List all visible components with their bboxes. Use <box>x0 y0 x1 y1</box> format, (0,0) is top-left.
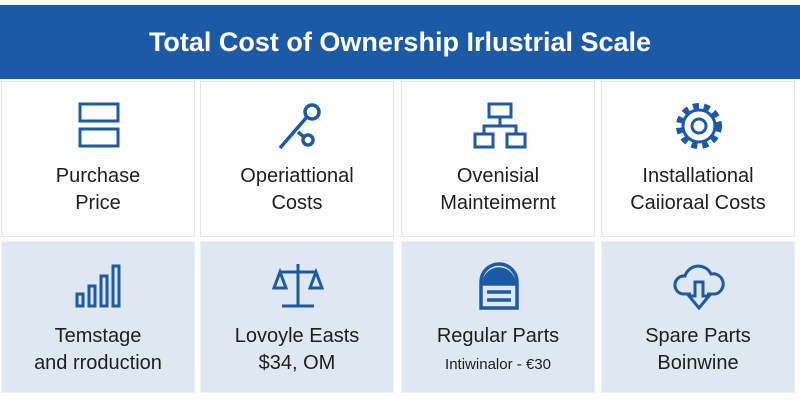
label <box>34 325 162 374</box>
label: Intiwinalor - €30 <box>445 356 551 373</box>
label: $34, OM <box>259 352 335 374</box>
panel: operational costs <box>200 81 394 237</box>
icon: cloud download <box>673 264 725 310</box>
title: Total Cost of Ownership Irlustrial Scale <box>149 27 651 57</box>
icon: bars <box>76 264 120 308</box>
label: Ovenisial <box>457 165 539 187</box>
label <box>437 325 559 373</box>
panel: maintenance <box>401 81 595 237</box>
panel: regular parts <box>401 241 595 393</box>
title <box>0 5 800 79</box>
label: Temstage <box>55 325 141 347</box>
label: Price <box>75 192 121 214</box>
label: Boinwine <box>657 352 739 374</box>
panel: installation <box>601 81 795 237</box>
label: Spare Parts <box>645 325 751 347</box>
panel: spare parts <box>601 241 795 393</box>
panel: purchase price <box>1 81 195 237</box>
label <box>440 165 556 214</box>
panel: lovoyle <box>200 241 394 393</box>
label: Installational <box>642 165 754 187</box>
icon: gauge <box>479 262 519 310</box>
label <box>630 165 766 214</box>
icon: bills <box>78 102 120 148</box>
label: and rroduction <box>34 352 162 374</box>
label: Mainteimernt <box>440 192 556 214</box>
icon: wrench <box>278 103 321 150</box>
label: Costs <box>271 192 323 214</box>
label: Caiioraal Costs <box>630 192 766 214</box>
icon: gear <box>676 103 722 149</box>
label <box>645 325 751 374</box>
label: Operiattional <box>240 165 354 187</box>
icon: flowchart <box>474 102 526 148</box>
icon: scales <box>272 264 324 308</box>
label <box>56 165 140 214</box>
label <box>240 165 354 214</box>
label: Lovoyle Easts <box>235 325 359 347</box>
panel: testing <box>1 241 195 393</box>
label: Regular Parts <box>437 325 559 347</box>
label <box>235 325 359 374</box>
label: Purchase <box>56 165 140 187</box>
